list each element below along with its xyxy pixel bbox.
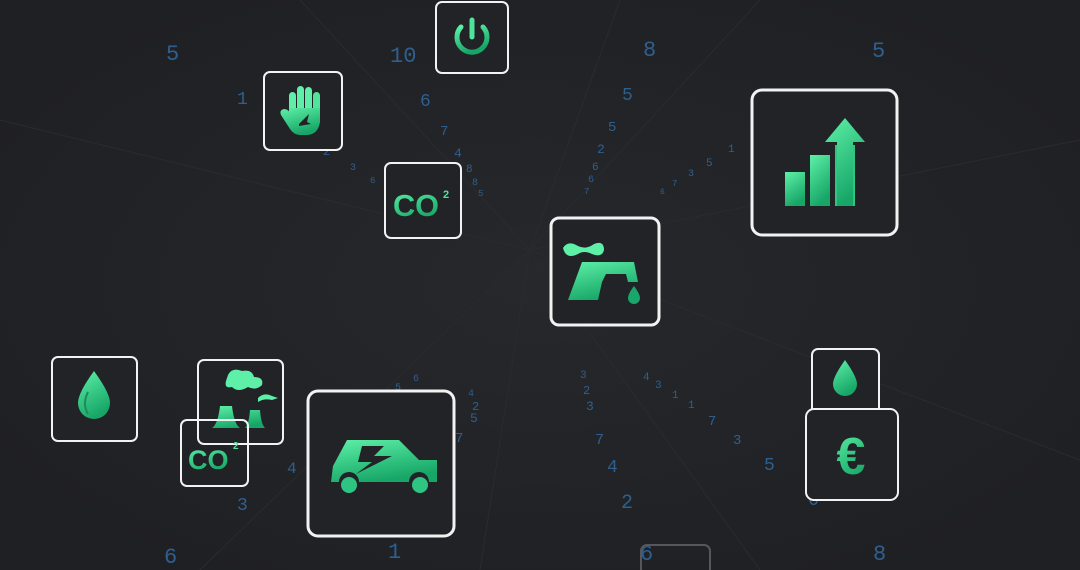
numbers: 1 [728,144,735,156]
numbers: 4 [468,389,474,400]
numbers: 2 [621,492,633,515]
numbers: 3 [237,496,248,516]
numbers: 6 [164,545,177,570]
numbers: 3 [370,404,377,416]
numbers: 6 [660,188,665,197]
numbers: 3 [350,163,356,174]
numbers: 1 [237,90,248,110]
numbers: 5 [608,120,616,136]
numbers: 3 [805,88,816,108]
numbers: 6 [370,176,375,186]
numbers: 5 [872,39,885,64]
numbers: 6 [592,162,599,174]
numbers: 10 [390,44,416,69]
chart box [752,90,897,235]
numbers: 4 [643,372,650,384]
numbers: 7 [455,431,463,447]
numbers: 6 [420,92,431,112]
tap box [551,218,659,325]
euro box [806,409,898,500]
hand box [264,72,342,150]
numbers: 3 [733,433,741,449]
numbers: 4 [454,146,462,161]
numbers: 2 [323,145,330,159]
numbers: 3 [763,120,771,136]
numbers: 8 [466,164,473,176]
drop right [812,349,879,415]
CO2 bottom [181,420,248,486]
numbers: 1 [688,400,695,412]
numbers: 8 [643,38,656,63]
numbers: 4 [287,460,297,478]
euro box: € [837,428,865,486]
numbers [164,38,886,570]
numbers: 1 [672,390,679,402]
numbers: 3 [586,399,594,414]
numbers: 3 [655,380,662,392]
numbers: 7 [708,414,716,430]
numbers: 6 [413,374,419,385]
numbers: 6 [588,175,594,186]
numbers: 4 [327,435,335,450]
numbers: 5 [478,189,483,199]
CO2 bottom: 2 [233,441,239,452]
numbers: 6 [808,491,819,511]
CO2 top: CO [393,188,439,223]
car box [308,391,454,536]
numbers: 7 [672,179,677,189]
CO2 top: 2 [443,189,449,201]
numbers: 5 [470,411,478,426]
partial box bottom [641,545,710,570]
numbers: 7 [595,432,604,449]
power box [436,2,508,73]
numbers: 1 [388,540,401,565]
numbers: 8 [472,178,478,189]
numbers: 5 [395,383,401,394]
numbers: 6 [348,417,355,431]
numbers: 6 [640,542,653,567]
drop left [52,357,137,441]
numbers: 7 [584,187,589,197]
numbers: 2 [583,384,590,398]
CO2 bottom: CO [188,445,228,475]
CO2 top [385,163,461,238]
factory [198,360,283,444]
numbers: 5 [622,86,633,106]
numbers: 5 [166,42,179,67]
numbers: 5 [764,456,775,476]
numbers: 3 [580,370,587,382]
numbers: 2 [472,400,479,414]
numbers: 7 [440,124,448,140]
numbers: 4 [607,458,618,478]
numbers: 5 [706,158,713,170]
numbers: 8 [873,542,886,567]
numbers: 3 [688,169,694,180]
numbers: 2 [597,142,605,157]
